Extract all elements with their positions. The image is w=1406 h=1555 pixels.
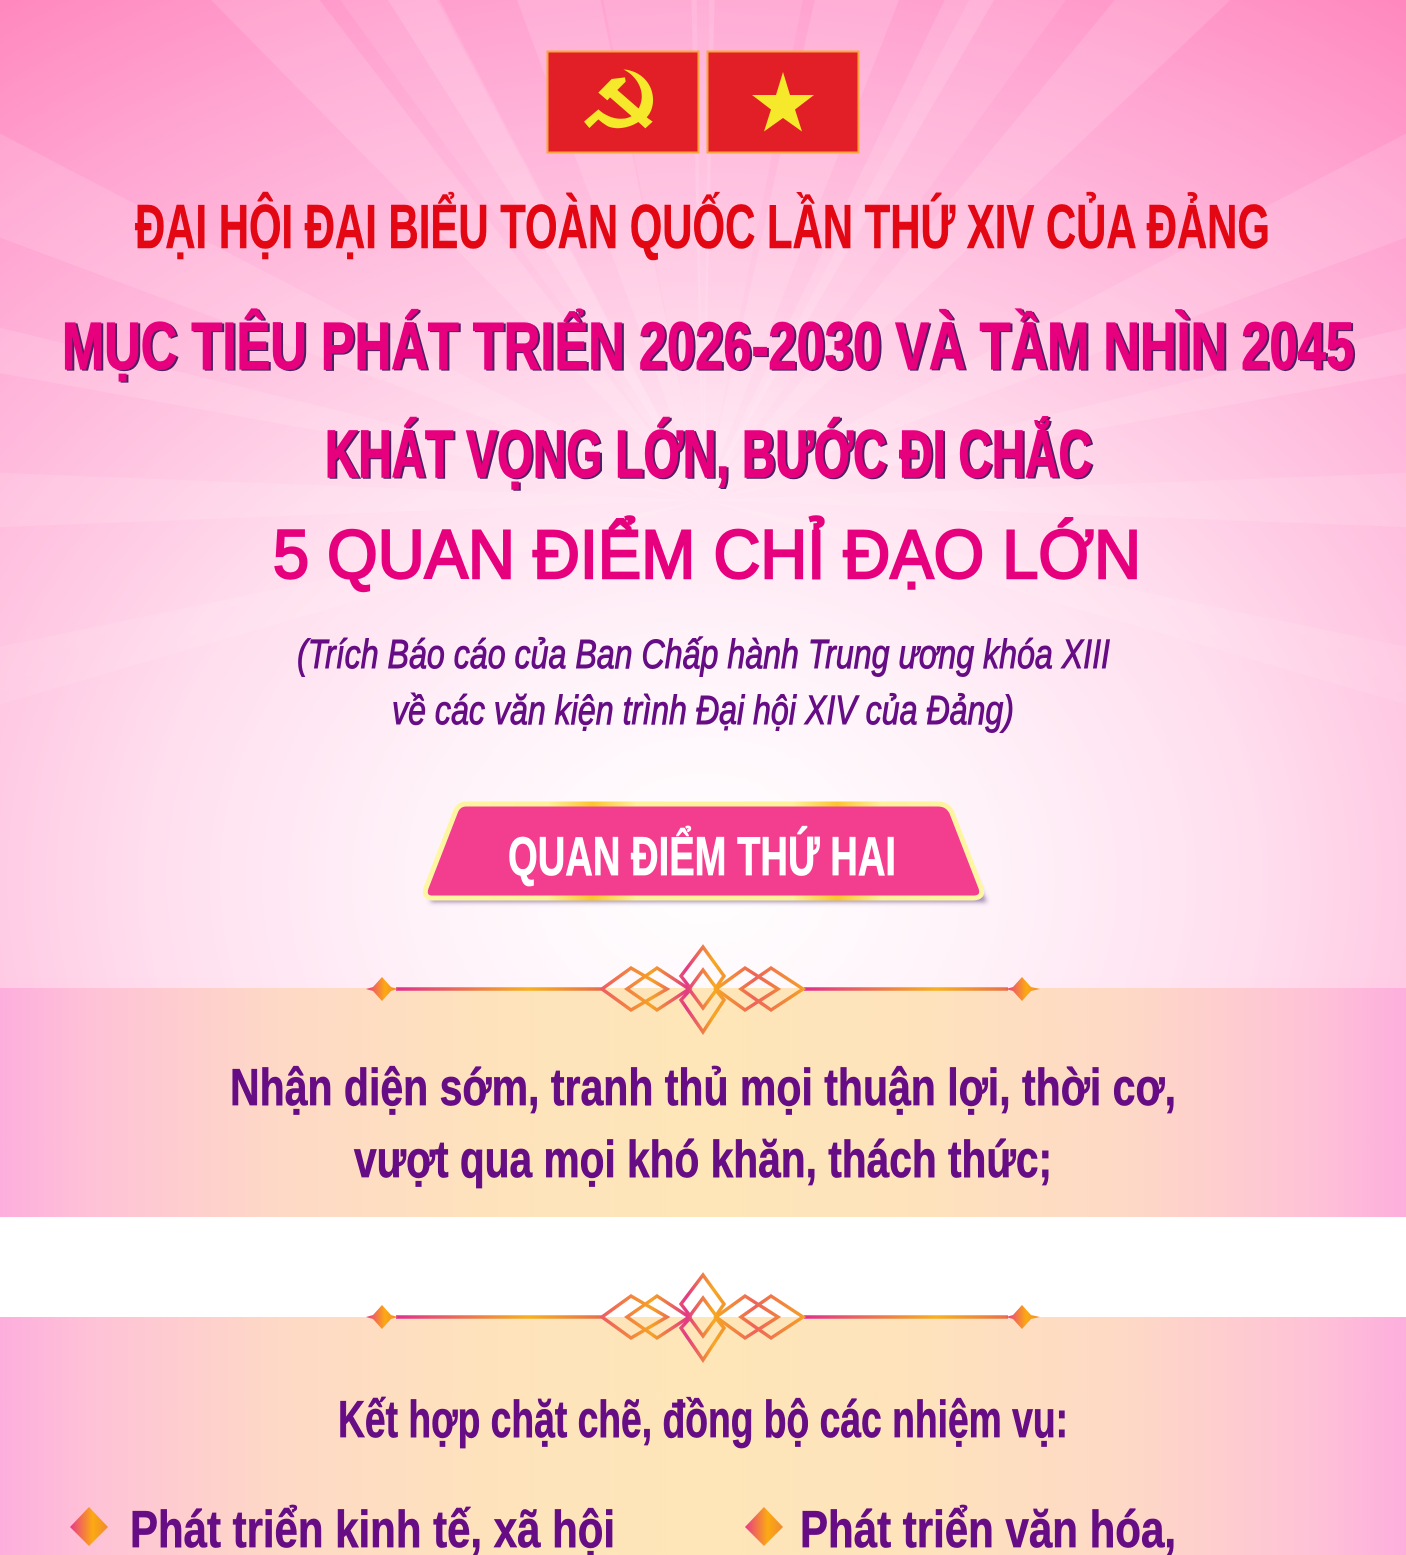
- icon: bullet diamond left: [70, 1507, 108, 1546]
- icon: yellow star: [752, 72, 814, 132]
- band: first content: [0, 988, 1406, 1217]
- heading: five guiding viewpoints: 5 QUAN ĐIỂM CHỈ ĐẠO LỚN: [273, 516, 1141, 593]
- source note: (Trích Báo cáo của Ban Chấp hành Trung ương khóa XIII: [297, 631, 1110, 677]
- ornament divider 2: [366, 1275, 1040, 1360]
- source note: về các văn kiện trình Đại hội XIV của Đảng): [392, 687, 1014, 733]
- flag: Vietnam: [708, 52, 858, 152]
- second content heading: Kết hợp chặt chẽ, đồng bộ các nhiệm vụ:: [338, 1391, 1068, 1449]
- first content text: vượt qua mọi khó khăn, thách thức;: [354, 1131, 1052, 1189]
- flag: Communist Party: [548, 52, 698, 152]
- banner: second viewpoint: QUAN ĐIỂM THỨ HAI: [508, 825, 896, 887]
- first content text: [230, 1059, 1176, 1189]
- title: slogan: KHÁT VỌNG LỚN, BƯỚC ĐI CHẮC: [325, 417, 1092, 492]
- background with sun rays: [0, 0, 1406, 988]
- icon: hammer and sickle: [584, 69, 653, 128]
- first content text: Nhận diện sớm, tranh thủ mọi thuận lợi, thời cơ,: [230, 1059, 1176, 1117]
- band: second content: [0, 1317, 1406, 1555]
- title: slogan: KHÁT VỌNG LỚN, BƯỚC ĐI CHẮC: [327, 418, 1094, 493]
- icon: bullet diamond right: [745, 1507, 783, 1546]
- ornament divider 1: [366, 947, 1040, 1032]
- banner: second viewpoint: [425, 804, 987, 902]
- source note: [297, 631, 1110, 733]
